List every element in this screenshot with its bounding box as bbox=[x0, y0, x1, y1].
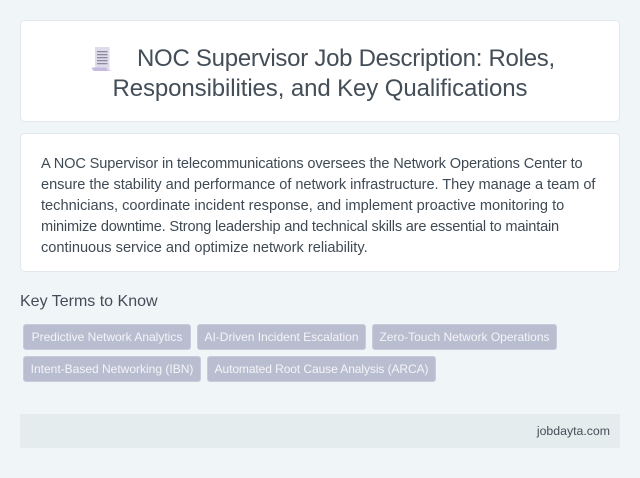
panel: description bbox=[20, 133, 620, 272]
heading: Responsibilities, and Key Qualifications bbox=[113, 75, 527, 102]
text block: description bbox=[41, 156, 596, 256]
heading: key terms: Key Terms to Know bbox=[20, 293, 158, 310]
heading bbox=[113, 45, 555, 102]
heading: NOC Supervisor Job Description: Roles, bbox=[137, 45, 555, 72]
footer bar bbox=[20, 414, 620, 448]
tag bbox=[207, 356, 436, 382]
text block: description: ensure the stability and performance of network infrastructure. They manage a team of bbox=[41, 177, 595, 193]
tag: Zero-Touch Network Operations bbox=[379, 330, 550, 344]
text block: description: minimize downtime. Strong leadership and technical skills are essential to maintain bbox=[41, 219, 559, 235]
panel: title bbox=[20, 20, 620, 122]
tags: key terms bbox=[23, 324, 557, 382]
tag: Predictive Network Analytics bbox=[32, 330, 182, 344]
text block: description: A NOC Supervisor in telecommunications oversees the Network Operations Center to bbox=[41, 156, 582, 172]
tag bbox=[372, 324, 557, 350]
text block: description: technicians, coordinate incident response, and implement proactive monitoring to bbox=[41, 198, 564, 214]
text block: description: continuous service and optimize network reliability. bbox=[41, 240, 368, 256]
tag bbox=[23, 356, 201, 382]
tag bbox=[197, 324, 366, 350]
tag bbox=[23, 324, 191, 350]
icon: document bbox=[92, 47, 111, 71]
footer text: jobdayta.com bbox=[537, 424, 610, 438]
tag: Intent-Based Networking (IBN) bbox=[31, 362, 193, 376]
tag: AI-Driven Incident Escalation bbox=[204, 330, 359, 344]
tag: Automated Root Cause Analysis (ARCA) bbox=[215, 362, 428, 376]
